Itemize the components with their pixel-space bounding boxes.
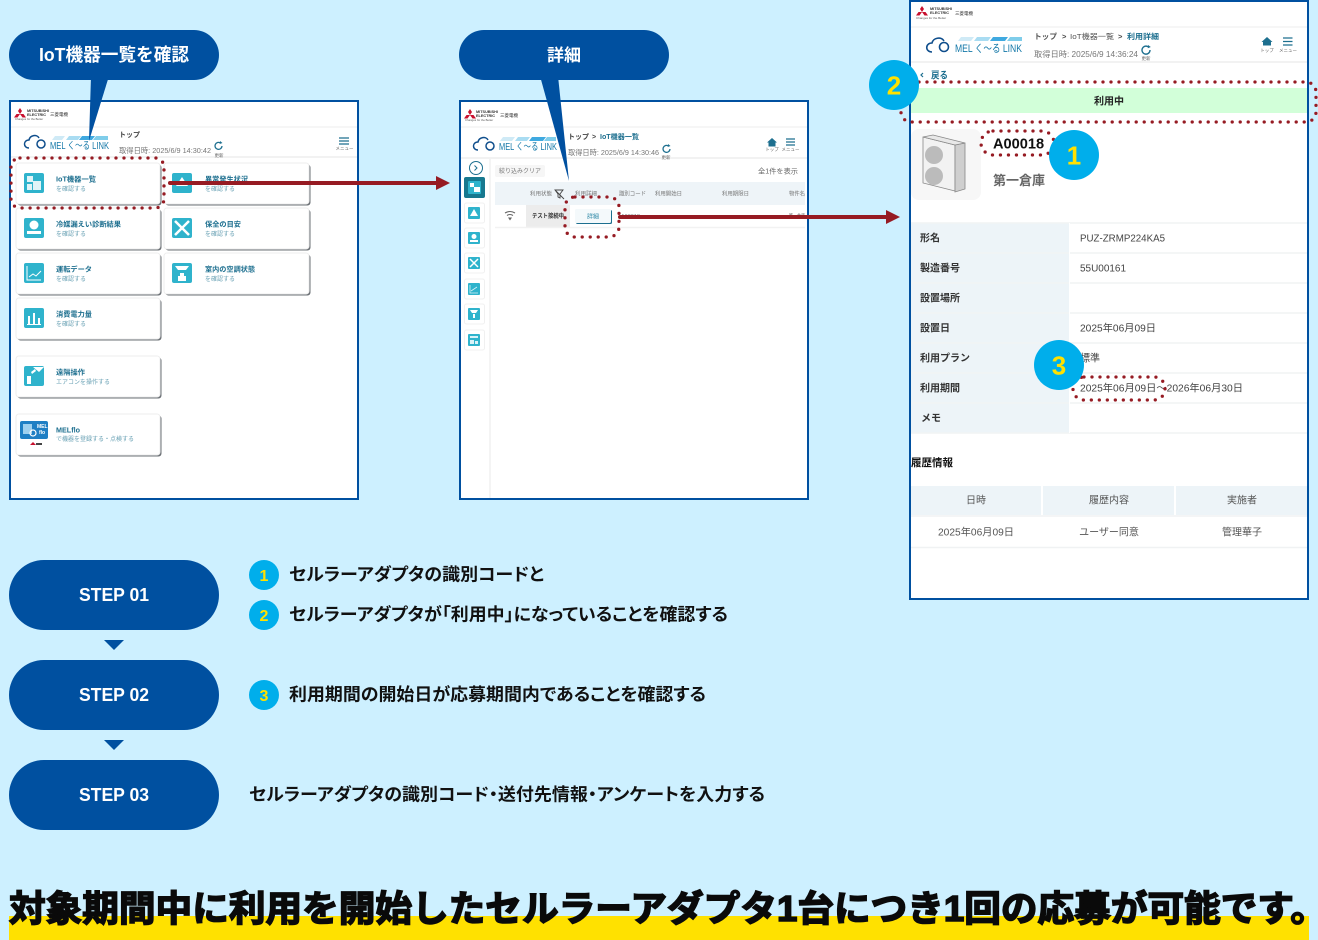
card: alarm status [164,163,310,206]
icon: refresh [662,144,671,161]
step 01 pill [9,560,219,630]
location name: 第一倉庫 [993,173,1045,188]
detail table: 設置場所 [920,292,960,304]
breadcrumb: トップ [1034,32,1058,41]
detail table: 2025年06月09日～2026年06月30日 [1080,382,1243,394]
step 02 pill: STEP 02 [79,685,149,705]
icon: menu [782,139,800,152]
card: alarm status: 異常発生状況 [205,174,248,184]
callout: detail [459,30,669,181]
status band [911,88,1307,113]
icon: menu: メニュー [1279,48,1297,53]
table header: 利用詳細 [575,190,597,198]
card: operating data: を確認する [56,275,86,283]
badge 2 on detail screen [869,60,919,110]
dotted highlight: detail button [565,197,619,237]
callout: IoT device list [9,30,219,141]
step 01 pill: STEP 01 [79,585,149,605]
dotted highlight: start date [1073,377,1165,400]
breadcrumb: > [592,134,596,141]
icon: home [1260,37,1274,54]
badge 1 on detail screen: 1 [1067,140,1081,170]
card: operating data: 運転データ [56,264,92,274]
breadcrumb: トップ [119,131,140,139]
card: power consumption: 消費電力量 [56,310,92,318]
MEL cloud link logo [474,137,557,153]
Mitsubishi Electric logo: MITSUBISHI [930,7,952,11]
arrow: list to detail [620,210,900,224]
last updated time: 取得日時: 2025/6/9 14:36:24 [1034,49,1139,59]
card: operating data [16,253,162,296]
Mitsubishi Electric logo: MITSUBISHI [476,110,498,114]
Mitsubishi Electric logo [916,6,973,20]
panel: usage detail screen [901,1,1316,599]
icon: refresh: 更新 [1142,55,1151,62]
step 1 item 1: 1 [260,568,269,585]
detail table: PUZ-ZRMP224KA5 [1080,234,1165,244]
card: IoT device list: を確認する [56,185,86,193]
detail table: 標準 [1080,352,1100,364]
card: refrigerant leak: を確認する [56,230,86,238]
card: MELflo: flo [39,430,45,436]
Mitsubishi Electric logo: ELECTRIC [27,113,46,117]
last updated time: 取得日時: 2025/6/9 14:30:46 [568,147,659,157]
table header: 物件名 [789,190,805,198]
card: IoT device list [16,163,162,206]
detail table: 2025年06月09日 [1080,322,1156,334]
Mitsubishi Electric logo: ELECTRIC [930,11,949,15]
detail table: メモ [921,412,941,424]
last updated time: 取得日時: 2025/6/9 14:30:42 [119,145,211,155]
card: MELflo [16,414,162,456]
detail table: 55U00161 [1080,264,1126,274]
card: MELflo: で機器を登録する・点検する [56,435,134,443]
detail table: 製造番号 [920,262,960,274]
badge 1 on detail screen [1049,130,1099,180]
callout: detail: 詳細 [547,45,581,65]
card: power consumption: を確認する [56,320,86,328]
card: maintenance guide: を確認する [205,230,235,238]
icon: menu [1279,38,1297,53]
table row: テスト接続中 [532,212,564,220]
MEL cloud link logo: MEL く〜る LINK [50,140,109,152]
Mitsubishi Electric logo: 三菱電機 [50,111,68,118]
table header: 利用期限日 [722,190,749,198]
card: MELflo: MELflo [56,428,80,434]
step 1 item 1: セルラーアダプタの識別コードと [289,564,544,584]
Mitsubishi Electric logo: Changes for the Better [916,16,946,20]
detail table: 利用期間 [920,382,960,394]
Mitsubishi Electric logo: ELECTRIC [476,114,495,118]
MEL cloud link logo: MEL く〜る LINK [955,43,1023,55]
badge 3 on detail screen [1034,340,1084,390]
detail button: 詳細 [587,212,599,220]
breadcrumb: トップ [568,133,589,141]
step 1 item 2: 2 [260,608,269,625]
sidebar icons [464,162,485,350]
history table: 日時 [966,494,986,506]
detail table: 形名 [920,232,940,244]
icon: menu: メニュー [336,146,354,151]
icon: refresh: 更新 [214,152,224,159]
step 1 item 1 [249,560,544,590]
Mitsubishi Electric logo [14,108,68,121]
table row: 第一倉庫 [789,212,805,220]
status band: 利用中 [1094,94,1124,108]
detail button [575,209,612,224]
device id: A00018 [993,136,1044,152]
breadcrumb: IoT機器一覧 [600,132,639,141]
Mitsubishi Electric logo: MITSUBISHI [27,109,49,113]
icon: menu [336,138,354,151]
filter clear button [495,165,545,177]
table header: 識別コード [619,190,646,198]
step 2 item 3 [249,680,706,710]
card: MELflo: MEL [37,424,48,430]
detail table: 利用プラン [920,352,970,364]
dotted highlight: IoT card [11,158,164,208]
arrow: menu to list [170,176,450,190]
MEL cloud link logo [24,136,109,152]
badge 3 on detail screen: 3 [1052,350,1066,380]
breadcrumb [568,132,639,141]
Mitsubishi Electric logo [464,109,518,122]
step 2 item 3: 利用期間の開始日が応募期間内であることを確認する [289,684,706,704]
icon: home: トップ [1260,48,1274,54]
outdoor unit image [911,129,981,200]
card: remote operation: 遠隔操作 [56,368,85,376]
breadcrumb [1034,31,1160,41]
table row [495,205,805,228]
back link: 戻る [931,70,948,82]
result count: 全1件を表示 [758,166,798,176]
card: remote operation: エアコンを操作する [56,378,110,386]
breadcrumb: > [1118,32,1123,41]
icon: home: トップ [765,147,779,153]
panel: top menu screen [10,101,358,499]
history table: 2025年06月09日 [938,526,1014,538]
table header: 利用状態 [530,190,552,198]
breadcrumb: 利用詳細 [1127,31,1160,41]
Mitsubishi Electric logo: Changes for the Better [465,118,493,122]
MEL cloud link logo: MEL く〜る LINK [499,141,557,153]
detail table: 設置日 [920,322,950,334]
arrow: step 2 to 3 [104,740,124,750]
badge 2 on detail screen: 2 [887,70,901,100]
card: indoor air conditioning [164,253,310,296]
table header: 利用開始日 [655,190,682,198]
card: indoor air conditioning: を確認する [205,275,235,283]
history table: ユーザー同意 [1079,526,1139,538]
detail table [911,223,1307,433]
card: remote operation [16,356,162,398]
table header [495,182,805,205]
card: maintenance guide [164,208,310,250]
step 03 pill: STEP 03 [79,785,149,805]
dotted highlight: status band [901,82,1316,122]
step 02 pill [9,660,219,730]
filter clear button: 絞り込みクリア [499,167,541,175]
icon: menu: メニュー [782,147,800,152]
highlighted conclusion: 対象期間中に利用を開始したセルラーアダプタ1台につき1回の応募が可能です。 [9,888,1318,929]
step 1 item 2 [249,600,728,630]
icon: refresh [214,141,224,159]
card: refrigerant leak [16,208,162,250]
step 1 item 2: セルラーアダプタが「利用中」になっていることを確認する [289,604,728,624]
step 3 text: セルラーアダプタの識別コード・送付先情報・アンケートを入力する [249,784,765,804]
history table: 管理華子 [1222,526,1262,538]
icon: home [765,138,779,153]
Mitsubishi Electric logo: 三菱電機 [955,10,973,17]
card: indoor air conditioning: 室内の空調状態 [205,264,255,274]
breadcrumb: > [1062,32,1067,41]
dotted highlight: device id [981,131,1054,155]
panel: IoT device list screen [460,101,808,499]
back link [921,70,948,82]
card: refrigerant leak: 冷媒漏えい診断結果 [56,220,121,228]
card: IoT device list: IoT機器一覧 [56,174,96,184]
icon: refresh: 更新 [662,154,671,161]
card: maintenance guide: 保全の目安 [205,220,241,228]
callout: IoT device list: IoT機器一覧を確認 [39,45,189,65]
step 2 item 3: 3 [260,688,269,705]
Mitsubishi Electric logo: Changes for the Better [15,117,43,121]
icon: refresh [1142,45,1151,62]
breadcrumb: IoT機器一覧 [1070,31,1115,41]
MEL cloud link logo [927,37,1023,55]
arrow: step 1 to 2 [104,640,124,650]
history table [911,486,1307,548]
card: alarm status: を確認する [205,185,235,193]
card: power consumption [16,298,162,340]
Mitsubishi Electric logo: 三菱電機 [500,112,518,119]
history heading: 履歴情報 [911,456,953,469]
history table: 実施者 [1227,494,1257,506]
table row: A00018 [621,214,640,220]
history table: 履歴内容 [1089,494,1129,506]
step 03 pill [9,760,219,830]
